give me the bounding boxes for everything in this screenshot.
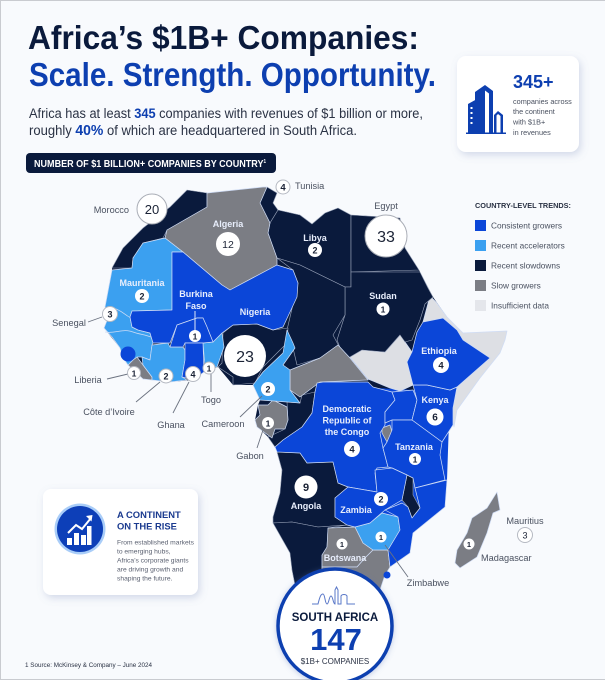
Liberia: Liberia <box>74 375 103 385</box>
Burkina Faso: Burkina <box>179 289 214 299</box>
icon: rising bar chart <box>54 504 106 554</box>
Mauritania: Mauritania <box>119 278 165 288</box>
section pill heading: NUMBER OF $1 BILLION+ COMPANIES BY COUNTRY <box>34 159 288 170</box>
Côte d'Ivoire <box>83 369 173 417</box>
Burkina Faso: Faso <box>185 301 207 311</box>
region: light blue, recent accelerators <box>104 238 400 550</box>
Botswana: Botswana <box>324 553 367 563</box>
Côte d'Ivoire: 2 <box>163 372 169 382</box>
Angola: Angola <box>291 501 322 511</box>
Tanzania <box>395 442 434 465</box>
Zimbabwe: Zimbabwe <box>407 578 449 588</box>
stat card: 345+: with $1B+ <box>512 118 545 126</box>
icon: buildings <box>466 85 506 134</box>
Ghana: 4 <box>190 370 196 380</box>
Tunisia: 4 <box>280 182 286 194</box>
Zambia <box>340 492 388 515</box>
Ghana: Ghana <box>157 420 186 430</box>
Tunisia <box>276 180 325 194</box>
Togo: 1 <box>207 364 212 374</box>
Nigeria: 23 <box>236 349 254 366</box>
callout: a continent on the rise: shaping the future. <box>117 576 173 582</box>
Zimbabwe <box>376 532 449 588</box>
legend: country-level trends: Insufficient data <box>491 300 549 310</box>
region: dark, recent slowdowns <box>112 187 433 590</box>
Algeria: Algeria <box>213 219 244 229</box>
legend: country-level trends: Slow growers <box>491 280 541 290</box>
stat card: 345+ <box>457 56 579 152</box>
Tanzania: Tanzania <box>395 442 434 452</box>
Zambia: Zambia <box>340 505 373 515</box>
South Africa callout circle: 147 <box>310 622 362 657</box>
Sudan <box>369 291 397 316</box>
Sudan: 1 <box>381 304 386 314</box>
Burkina Faso <box>179 289 214 342</box>
callout: a continent on the rise: to emerging hubs, <box>117 548 171 556</box>
Mauritania: 2 <box>139 292 145 302</box>
callout: a continent on the rise: are driving growth and <box>117 566 183 574</box>
Gabon <box>236 417 274 461</box>
Kenya: Kenya <box>421 395 450 405</box>
intro text: Africa has at least 345 companies with revenues of $1 billion or more, <box>29 106 423 121</box>
title: Africa’s $1B+ Companies: <box>28 19 419 56</box>
South Africa callout circle: $1B+ COMPANIES <box>301 657 369 666</box>
Democratic Republic of the Congo: Democratic <box>322 404 372 414</box>
stat card: 345+: the continent <box>513 107 555 116</box>
legend: country-level trends: COUNTRY-LEVEL TRENDS: <box>475 201 571 210</box>
Zimbabwe: 1 <box>379 533 383 542</box>
legend: country-level trends <box>475 201 571 311</box>
legend: country-level trends: Recent slowdowns <box>491 260 560 270</box>
Algeria <box>213 219 244 256</box>
Gabon: 1 <box>266 418 271 428</box>
Botswana: 1 <box>340 540 344 549</box>
intro text <box>29 106 423 139</box>
Botswana <box>324 538 367 563</box>
legend: country-level trends: Consistent growers <box>491 220 562 230</box>
callout: a continent on the rise: From established markets <box>117 540 195 546</box>
title <box>28 19 436 93</box>
Libya: Libya <box>303 233 328 243</box>
Nigeria <box>224 307 271 377</box>
Cameroon <box>202 382 275 429</box>
Cameroon: Cameroon <box>202 419 244 429</box>
Egypt: Egypt <box>374 201 398 211</box>
South Africa callout circle: SOUTH AFRICA <box>292 612 378 624</box>
Sudan: Sudan <box>369 291 397 301</box>
region: light grey, insufficient data <box>350 296 507 427</box>
section pill heading: 1 <box>263 159 266 165</box>
Côte d'Ivoire: Côte d’Ivoire <box>83 407 135 417</box>
Angola: 9 <box>303 482 309 494</box>
Algeria: 12 <box>222 239 234 251</box>
Kenya <box>421 395 450 426</box>
Togo <box>201 362 221 405</box>
continent silhouette backing <box>104 187 463 610</box>
Egypt <box>365 201 407 257</box>
Democratic Republic of the Congo: the Congo <box>325 427 370 437</box>
Senegal: 3 <box>107 310 113 320</box>
Ghana <box>157 366 200 430</box>
Mauritius <box>506 516 544 542</box>
Morocco: Morocco <box>94 205 129 215</box>
Madagascar: 1 <box>467 540 471 549</box>
Mauritania <box>119 278 165 303</box>
Morocco <box>94 194 167 224</box>
stat card: 345+: companies across <box>513 97 572 106</box>
Morocco: 20 <box>145 202 159 217</box>
source note: 1 Source: McKinsey & Company – June 2024 <box>25 662 153 669</box>
Madagascar: Madagascar <box>481 553 532 563</box>
stat card: 345+: 345+ <box>513 72 554 92</box>
country labels and bubbles <box>52 180 544 588</box>
Tunisia: Tunisia <box>295 181 325 191</box>
section pill heading <box>26 153 276 173</box>
Ethiopia <box>421 346 458 373</box>
Democratic Republic of the Congo: Republic of <box>322 416 373 426</box>
Mauritius: 3 <box>522 530 528 540</box>
map of Africa <box>104 187 507 610</box>
title: Scale. Strength. Opportunity. <box>29 56 436 93</box>
Democratic Republic of the Congo <box>322 404 373 457</box>
icon: city skyline <box>312 587 355 604</box>
Kenya: 6 <box>432 412 438 424</box>
Cameroon: 2 <box>265 384 271 394</box>
Liberia <box>74 366 140 385</box>
Nigeria: Nigeria <box>240 307 271 317</box>
legend: country-level trends: Recent accelerators <box>491 240 565 250</box>
Burkina Faso: 1 <box>193 332 198 342</box>
region: blue, consistent growers <box>120 252 490 578</box>
Liberia: 1 <box>132 368 137 378</box>
Zambia: 2 <box>378 494 384 504</box>
Libya: 2 <box>312 246 318 256</box>
region: grey, slow growers <box>128 187 500 610</box>
callout: a continent on the rise: A CONTINENT <box>117 509 181 520</box>
Democratic Republic of the Congo: 4 <box>349 444 355 456</box>
Tanzania: 1 <box>413 454 418 464</box>
Libya <box>303 233 328 257</box>
callout: a continent on the rise: Africa’s corporate giants <box>117 558 189 564</box>
Egypt: 33 <box>377 229 395 246</box>
intro text: roughly 40% of which are headquartered in South Africa. <box>29 123 357 139</box>
Angola <box>291 476 322 511</box>
Senegal <box>52 306 118 328</box>
Senegal: Senegal <box>52 318 86 328</box>
Ethiopia: Ethiopia <box>421 346 458 356</box>
callout: a continent on the rise: ON THE RISE <box>117 520 177 532</box>
Madagascar <box>464 538 532 563</box>
Gabon: Gabon <box>236 451 264 461</box>
South Africa callout circle <box>278 569 392 680</box>
stat card: 345+: in revenues <box>513 128 551 137</box>
Mauritius: Mauritius <box>506 516 544 526</box>
callout: a continent on the rise <box>43 489 198 595</box>
Togo: Togo <box>201 395 221 405</box>
Ethiopia: 4 <box>438 360 444 372</box>
